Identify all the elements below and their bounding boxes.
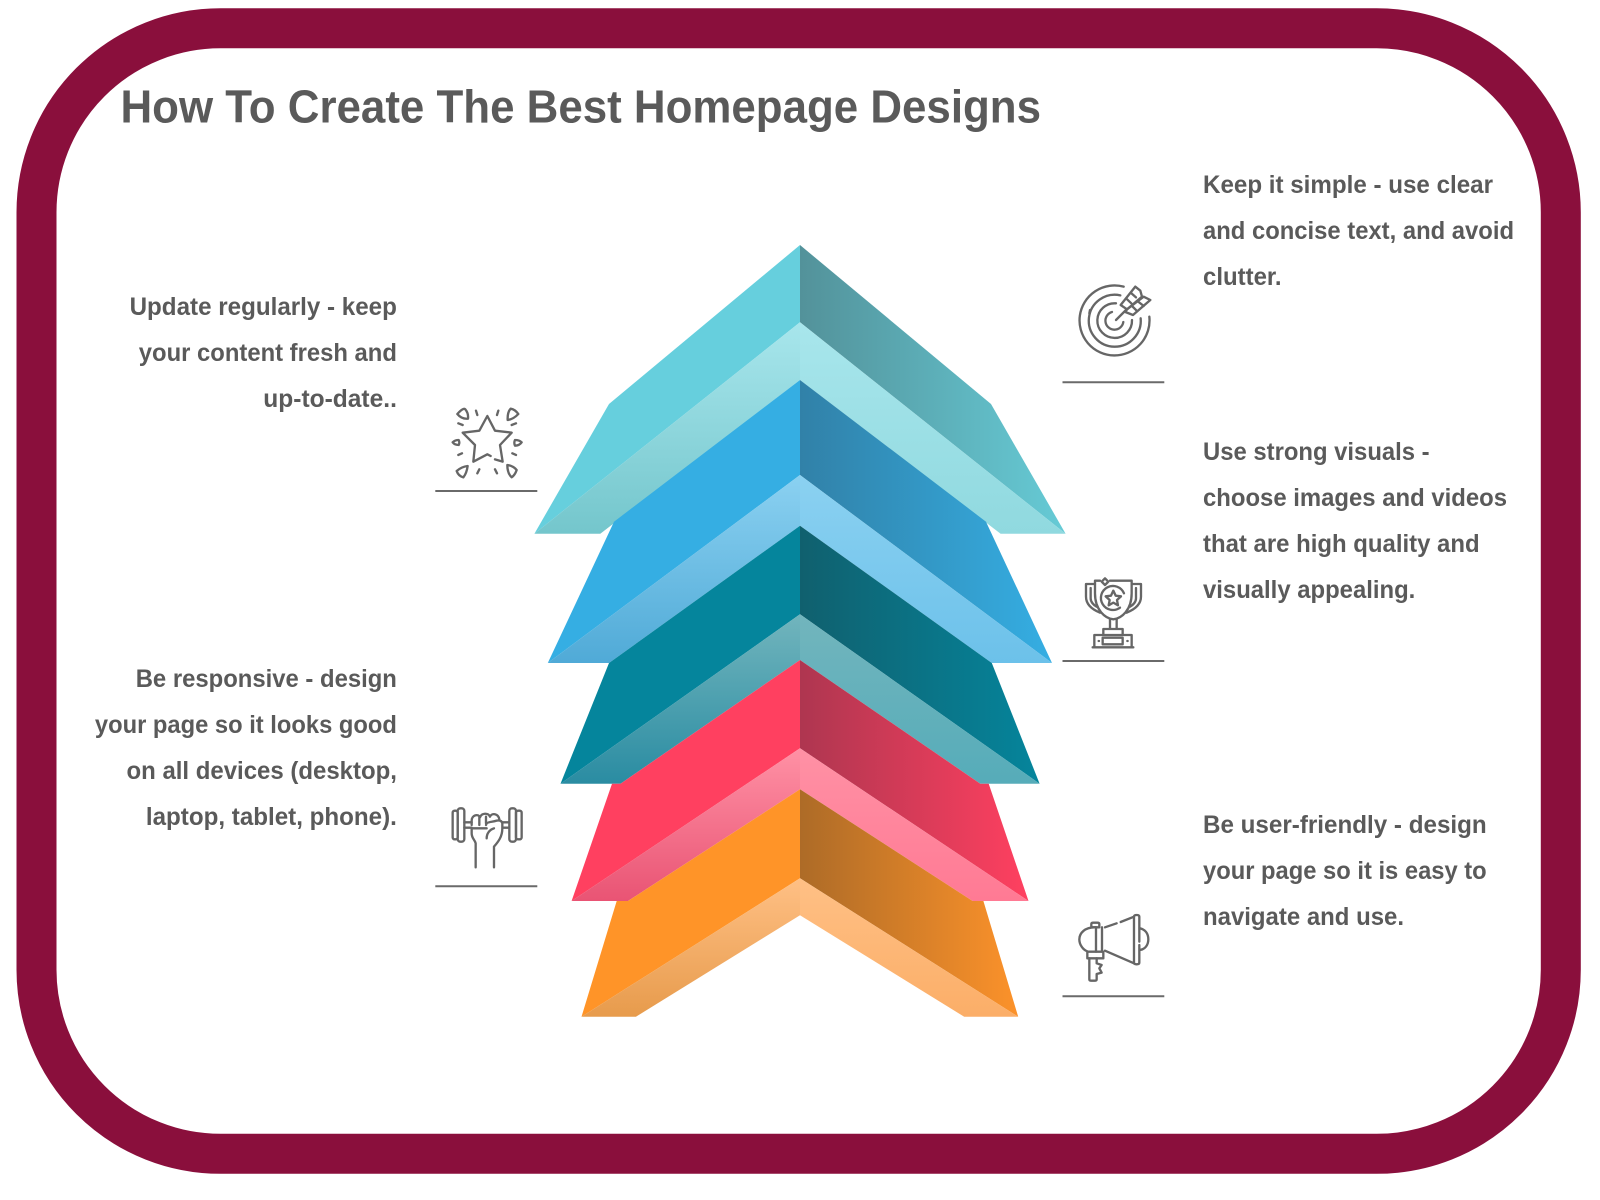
icon: megaphone bbox=[1079, 915, 1148, 981]
text block: use strong visuals: that are high quality and bbox=[1203, 530, 1480, 558]
icon: target with arrow bbox=[1080, 285, 1150, 355]
chevron layer 1: light teal bbox=[534, 245, 1066, 534]
chevron layer 4: red bbox=[572, 660, 1028, 901]
text block: be responsive bbox=[95, 665, 397, 831]
divider: target bbox=[1062, 381, 1164, 383]
text block: be responsive: your page so it looks good bbox=[95, 711, 397, 739]
text block: keep it simple bbox=[1203, 171, 1514, 291]
divider: megaphone bbox=[1062, 995, 1164, 997]
text block: update regularly: Update regularly - keep bbox=[130, 293, 397, 321]
title: How To Create The Best Homepage Designs bbox=[120, 81, 1041, 133]
text block: use strong visuals: visually appealing. bbox=[1203, 576, 1415, 604]
text block: use strong visuals bbox=[1203, 438, 1507, 604]
text block: be user-friendly bbox=[1203, 811, 1487, 931]
text block: update regularly: your content fresh and bbox=[139, 339, 397, 367]
text block: be responsive: Be responsive - design bbox=[136, 665, 397, 693]
text block: be user-friendly: your page so it is easy to bbox=[1203, 857, 1487, 885]
text block: keep it simple: clutter. bbox=[1203, 263, 1282, 291]
icon: fist with dumbbell bbox=[453, 808, 522, 867]
text block: use strong visuals: Use strong visuals - bbox=[1203, 438, 1430, 466]
text block: be user-friendly: navigate and use. bbox=[1203, 903, 1404, 931]
chart: stacked chevron arrow bbox=[534, 245, 1066, 1017]
divider: star bbox=[435, 490, 537, 492]
divider: dumbbell bbox=[435, 885, 537, 887]
icon: shining star bbox=[453, 409, 522, 477]
chevron layer 2: blue bbox=[548, 380, 1052, 663]
text block: keep it simple: and concise text, and avoid bbox=[1203, 217, 1514, 245]
text block: update regularly bbox=[130, 293, 397, 413]
text block: be responsive: laptop, tablet, phone). bbox=[146, 803, 397, 831]
text block: keep it simple: Keep it simple - use clear bbox=[1203, 171, 1493, 199]
divider: trophy bbox=[1062, 660, 1164, 662]
chevron layer 5: orange bbox=[582, 789, 1018, 1017]
chevron layer 3: dark teal bbox=[560, 526, 1040, 784]
text block: use strong visuals: choose images and videos bbox=[1203, 484, 1507, 512]
text block: be responsive: on all devices (desktop, bbox=[126, 757, 397, 785]
text block: be user-friendly: Be user-friendly - design bbox=[1203, 811, 1487, 839]
icon: trophy bbox=[1086, 578, 1141, 647]
text block: update regularly: up-to-date.. bbox=[263, 385, 397, 413]
